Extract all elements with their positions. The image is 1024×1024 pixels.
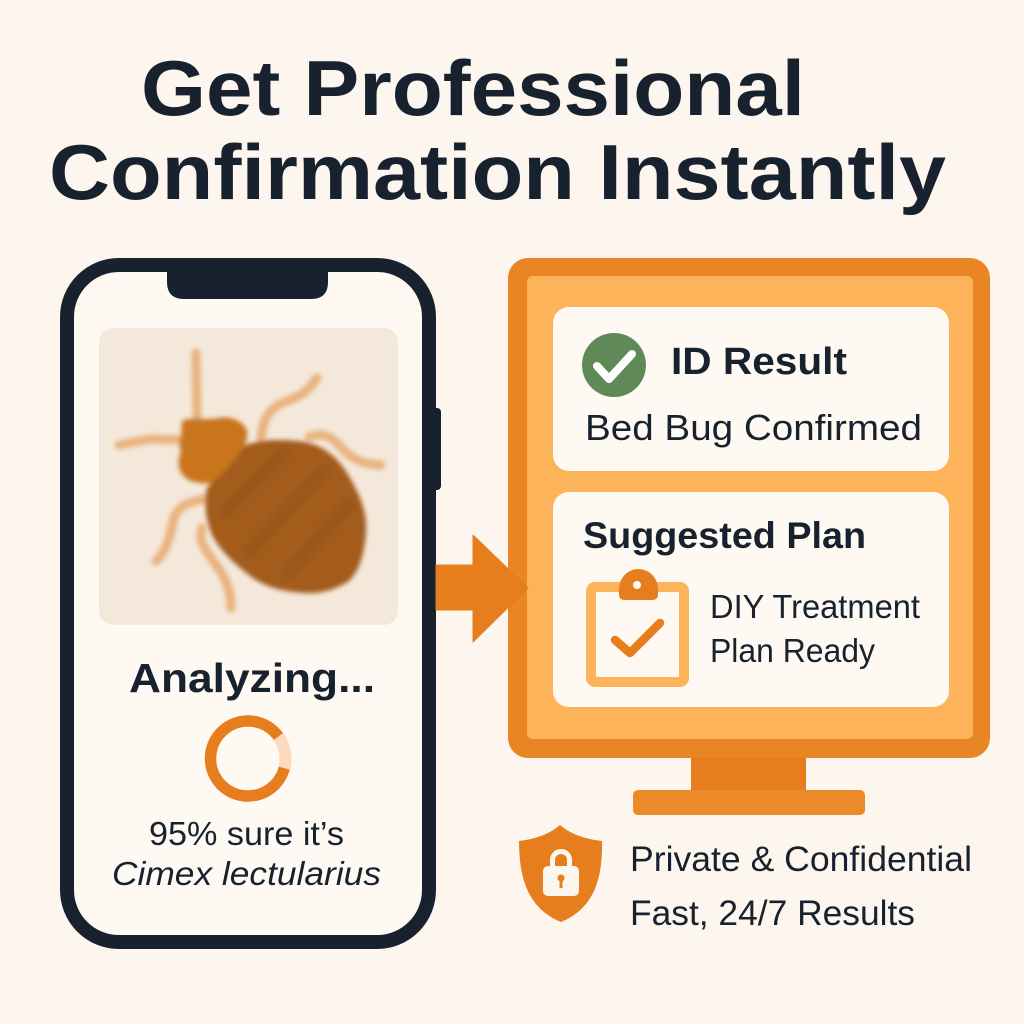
bed bug photo — [99, 328, 398, 625]
title — [49, 44, 946, 216]
phone side button — [430, 408, 441, 490]
privacy and speed text — [630, 840, 972, 933]
card: suggested plan — [553, 492, 949, 707]
plan text — [710, 588, 920, 669]
title: Confirmation Instantly — [49, 128, 946, 216]
card: ID result — [553, 307, 949, 471]
heading: ID result: ID Result — [671, 341, 847, 383]
confidence text: Cimex lectularius — [112, 855, 381, 892]
panel: phone — [67, 265, 441, 942]
privacy and speed text: Fast, 24/7 Results — [630, 894, 915, 933]
privacy and speed text: Private & Confidential — [630, 840, 972, 879]
plan text: DIY Treatment — [710, 588, 920, 625]
plan text: Plan Ready — [710, 632, 875, 669]
arrow — [436, 535, 528, 642]
analyzing label: Analyzing... — [129, 655, 375, 701]
heading: suggested plan: Suggested Plan — [583, 515, 866, 556]
icon: check badge — [582, 333, 646, 397]
progress ring — [210, 721, 286, 796]
panel: monitor — [508, 258, 990, 815]
title: Get Professional — [141, 44, 805, 132]
phone body — [67, 265, 429, 942]
result text: Bed Bug Confirmed — [585, 407, 922, 448]
icon: clipboard — [591, 569, 684, 682]
monitor frame — [508, 258, 990, 758]
icon: shield with lock — [519, 825, 602, 922]
phone notch — [167, 270, 328, 299]
confidence text — [112, 815, 381, 892]
confidence text: 95% sure it’s — [149, 815, 344, 852]
monitor screen — [527, 276, 973, 739]
monitor stand — [633, 750, 865, 815]
